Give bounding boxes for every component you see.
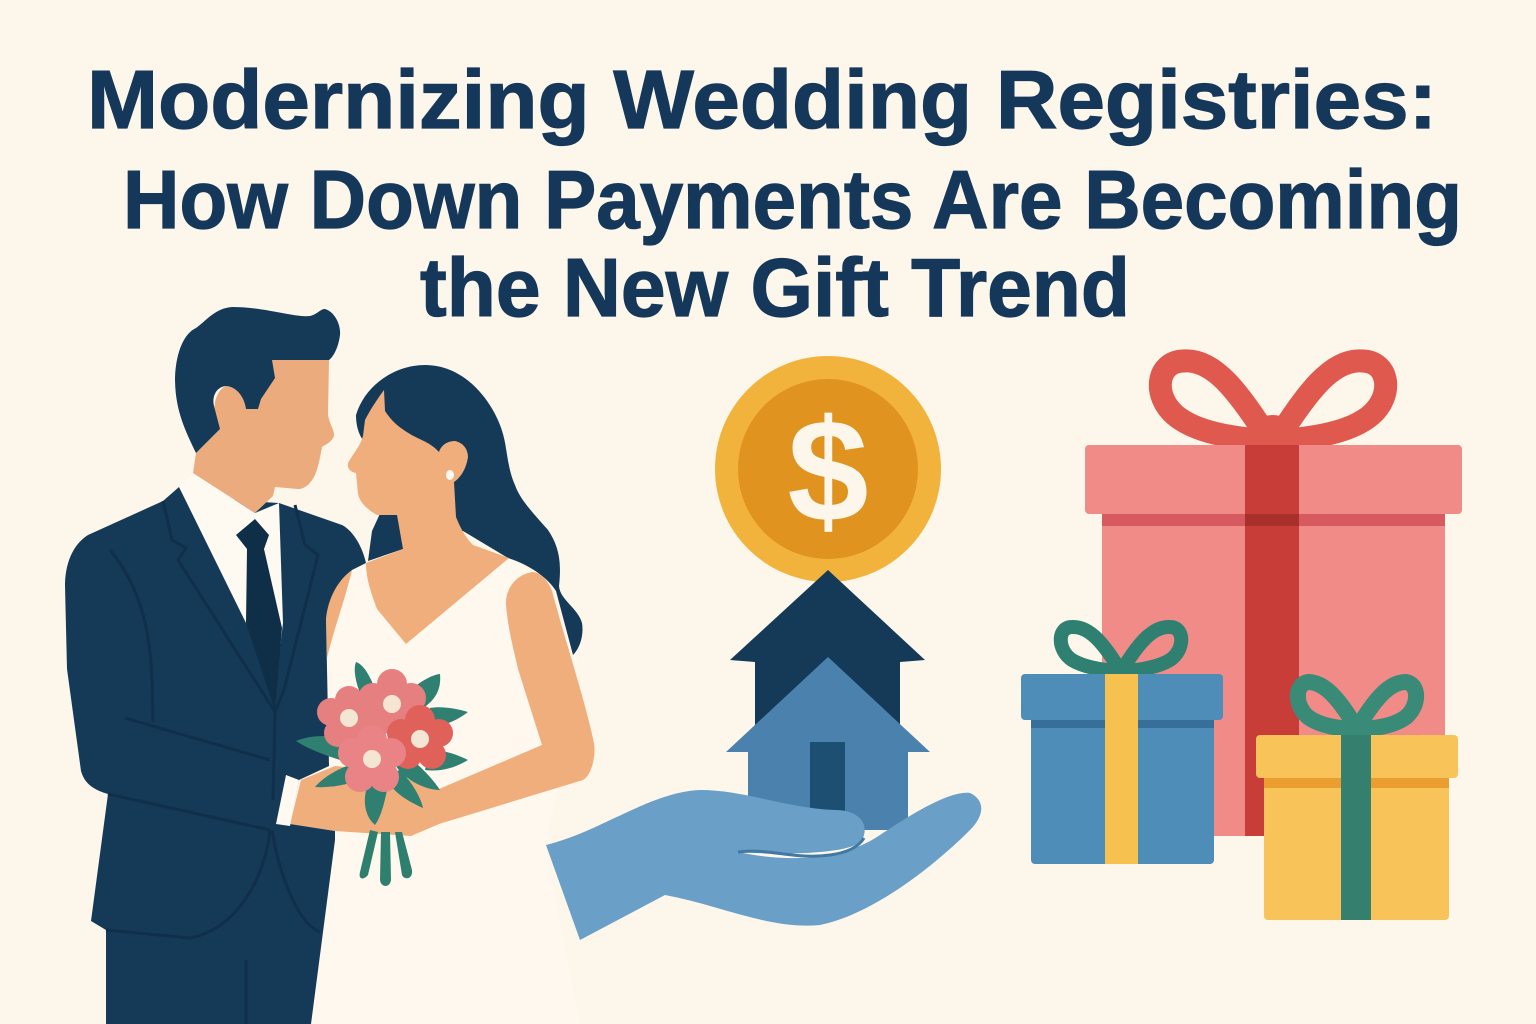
dark house [730, 570, 925, 730]
icon: gold dollar coin [715, 356, 941, 582]
icon: gold dollar coin: $ [787, 389, 869, 552]
flower 1 [317, 686, 380, 747]
flower 2 [358, 669, 426, 735]
large ribbon [1245, 445, 1299, 836]
large body [1102, 514, 1445, 836]
bride left shoulder [326, 570, 352, 658]
title [87, 53, 1462, 334]
bride face and neck [348, 390, 509, 644]
groom suit creases [106, 501, 320, 1024]
yellow band [1264, 778, 1449, 788]
groom face [193, 360, 334, 513]
yellow ribbon [1341, 735, 1371, 920]
house door [810, 742, 845, 817]
bride hair [356, 365, 583, 655]
yellow body [1264, 778, 1449, 920]
bride arm and hands [290, 572, 595, 836]
flower 3 [387, 705, 453, 769]
hand crease [738, 838, 864, 856]
gift: blue [1021, 627, 1223, 864]
blue lid [1021, 674, 1223, 720]
blue body [1031, 720, 1214, 864]
groom hair [175, 307, 340, 453]
bouquet stems [360, 830, 412, 886]
groom suit [65, 487, 366, 1024]
title: the New Gift Trend [420, 241, 1130, 334]
icon: houses [726, 570, 930, 830]
gift: yellow [1256, 682, 1458, 920]
bouquet leaves [296, 662, 468, 825]
blue band [1031, 720, 1214, 728]
flower 4 [338, 725, 406, 792]
title: Modernizing Wedding Registries: [87, 53, 1437, 146]
large band [1102, 514, 1445, 526]
icon: open hand [546, 790, 981, 940]
bride dress [311, 558, 580, 1024]
yellow bow [1298, 682, 1416, 729]
large lid [1085, 445, 1462, 514]
groom shirt [179, 473, 283, 690]
bride earring [446, 470, 454, 480]
gift: large pink [1085, 361, 1462, 836]
blue ribbon [1105, 674, 1138, 864]
bouquet [296, 662, 468, 886]
blue house [726, 657, 930, 830]
groom shirt cuff [276, 775, 299, 826]
groom tie [236, 519, 282, 711]
yellow lid [1256, 735, 1458, 778]
large bow [1160, 361, 1386, 441]
blue bow [1061, 627, 1181, 672]
illustration: groom [65, 307, 366, 1024]
illustration: bride [290, 365, 595, 1024]
title: How Down Payments Are Becoming [123, 153, 1462, 246]
